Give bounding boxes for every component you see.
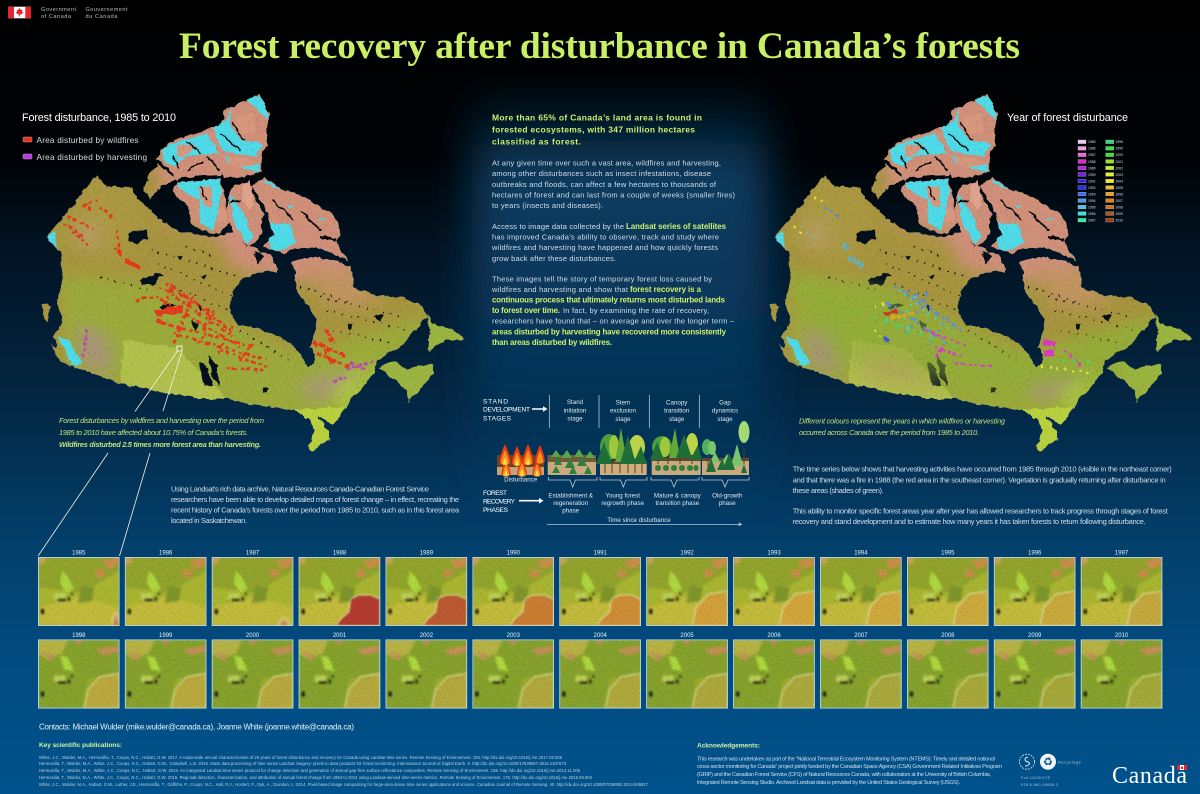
image: 1990: [472, 557, 554, 626]
year labels: 1994: [854, 550, 868, 556]
panel: left map heading and legend: Forest disturbance, 1985 to 2010: [22, 112, 176, 124]
legend: harvesting: Area disturbed by harvesting: [36, 153, 147, 162]
year labels: 2009: [1028, 633, 1042, 639]
legend: year of disturbance: 2001: [1116, 160, 1123, 164]
text block: time series explanation: [793, 464, 1172, 526]
arrow: phases: [519, 498, 544, 504]
image: 2009: [994, 640, 1075, 708]
key scientific publications: Key scientific publications:: [39, 742, 122, 749]
key scientific publications: Hermosilla, T., Wulder, M.A., White, J.C., Coops, N.C., Hobart, G.W., Campbell, L.B. 2016. Mass data processing of time series Landsat imagery: pixels to data products for forest monitoring. International Journal of Digital Earth. 9. http://dx.doi.org/10.1080/17538947.2016.1187673: [39, 761, 567, 766]
legend: year of disturbance: 1999: [1116, 147, 1123, 151]
image: 1989: [386, 557, 467, 626]
title: Forest recovery after disturbance in Canada’s forests: [179, 26, 1020, 67]
caption: left map: Wildfires disturbed 2.5 times more forest area than harvesting.: [59, 440, 261, 449]
contacts: Contacts: Michael Wulder (mike.wulder@canada.ca), Joanne White (joanne.white@canada.ca): [39, 722, 354, 732]
text block: time series explanation: recovery and stand development and to estimate how many years it has taken forests to return following disturbance.: [793, 517, 1146, 526]
year labels: 1999: [159, 633, 173, 639]
time series: 1985-2010: [38, 550, 1162, 708]
forest recovery phases label: RECOVERY: [483, 498, 516, 506]
diagram: stand development and forest recovery: [483, 395, 750, 526]
paragraph: disturbance: to years (insects and diseases).: [492, 201, 603, 210]
legend: year of disturbance: 2005: [1116, 186, 1123, 190]
legend: year of disturbance: 2000: [1116, 153, 1123, 157]
paragraph: disturbance: At any given time over such a vast area, wildfires and harvesting,: [492, 158, 721, 168]
year labels: 2003: [507, 633, 521, 639]
image: 1985: [38, 557, 120, 628]
paragraph: recovery: wildfires and harvesting and show that: [491, 285, 629, 294]
stage labels: stage: [669, 416, 685, 423]
caption: right map: [799, 416, 1006, 437]
legend: year of disturbance: 1992: [1088, 186, 1096, 190]
legend: year of disturbance: 1985: [1088, 140, 1096, 144]
year labels: 1985: [72, 550, 86, 556]
legend: year of disturbance: 1990: [1088, 173, 1096, 177]
heading: year of forest disturbance: Year of forest disturbance: [1007, 112, 1128, 124]
government of Canada signature: Gouvernement: [86, 7, 128, 13]
stage labels: [564, 399, 738, 423]
phase labels: Mature & canopy: [654, 492, 702, 499]
image: 1994: [820, 557, 902, 626]
year labels: 2005: [680, 633, 694, 639]
paragraph: recovery: In fact, by examining the rate of recovery,: [563, 306, 709, 315]
paragraph: disturbance: [492, 158, 736, 210]
legend: year of disturbance: 2002: [1116, 166, 1123, 170]
text block: time series explanation: and that there was a fire in 1988 (the red area in the southeast corner). Vegetation is gradually returning after disturbance in: [793, 476, 1166, 484]
year labels: 1995: [941, 550, 955, 556]
year labels: 2008: [941, 633, 955, 639]
government of Canada signature: [8, 7, 128, 20]
legend: year of disturbance: 2003: [1116, 173, 1123, 177]
paragraph: Landsat: grow back after these disturbances.: [492, 254, 616, 263]
icon: disturbance fire: [497, 444, 545, 477]
caption: left map: [59, 416, 264, 449]
paragraph: recovery: These images tell the story of temporary forest loss caused by: [492, 274, 712, 284]
legend: year of disturbance: 1991: [1088, 179, 1096, 183]
legend: year of disturbance: 1993: [1088, 192, 1096, 196]
year labels: 2001: [333, 633, 347, 639]
stage labels: Gap: [719, 399, 731, 406]
stage labels: Stand: [567, 399, 584, 406]
arrow: stages: [532, 406, 548, 412]
legend: year of disturbance: 1996: [1088, 212, 1096, 216]
year labels: 1987: [246, 550, 260, 556]
image: 2001: [299, 640, 380, 708]
text block: time series explanation: This ability to monitor specific forest areas year after year has allowed researchers to track progress through stages of forest: [793, 506, 1169, 516]
diagram: stand development and forest recovery: Time since disturbance: [607, 517, 671, 524]
text block: time series explanation: The time series below shows that harvesting activities have occurred from 1985 through 2010 (visible in the northeast corner): [793, 464, 1172, 474]
government of Canada signature: of Canada: [41, 14, 72, 20]
image: 1993: [733, 557, 815, 626]
legend: year of disturbance: 2006: [1116, 192, 1123, 196]
harvesting areas: [83, 330, 373, 382]
paragraph: recovery: researchers have found that – on average and over the longer term –: [492, 316, 735, 326]
stage labels: transition: [664, 408, 690, 415]
key scientific publications: [39, 742, 649, 787]
year labels: 1997: [1115, 550, 1129, 556]
legend: year of disturbance: 1997: [1088, 219, 1096, 223]
legend: year of disturbance: [1078, 140, 1123, 223]
caption: right map: occurred across Canada over the period from 1985 to 2010.: [799, 428, 979, 437]
year labels: 1990: [507, 550, 521, 556]
year labels: 1989: [420, 550, 434, 556]
image: 1995: [907, 557, 988, 626]
diagram: stand development and forest recovery: Disturbance: [504, 477, 538, 484]
paragraph: Landsat: Access to image data collected by the: [492, 222, 624, 231]
year labels: [72, 550, 1129, 639]
legend: year of disturbance: 2010: [1116, 219, 1123, 223]
panel: mature forest trees: [650, 428, 702, 475]
phase labels: regrowth phase: [601, 500, 645, 507]
heading statement: More than 65% of Canada’s land area is found in: [492, 112, 702, 122]
image: 2000: [212, 640, 293, 708]
stage labels: dynamics: [712, 408, 738, 415]
paragraph: disturbance: among other disturbances such as insect infestations, disease: [492, 169, 711, 178]
year labels: 1992: [680, 550, 694, 556]
legend: wildfires: Area disturbed by wildfires: [36, 136, 138, 145]
year labels: 2004: [594, 633, 608, 639]
year labels: 1998: [72, 633, 86, 639]
text block: Landsat data archive: located in Saskatchewan.: [171, 516, 247, 525]
image: 2004: [559, 640, 641, 708]
year labels: 1988: [333, 550, 347, 556]
year labels: 2002: [420, 633, 434, 639]
panel: left map heading and legend: [22, 112, 176, 162]
year labels: 2000: [246, 633, 260, 639]
image: 2002: [386, 640, 467, 708]
image: 1997: [1081, 557, 1162, 626]
stage labels: exclusion: [610, 408, 636, 415]
key scientific publications: Hermosilla, T., Wulder, M.A., White, J.C., Coops, N.C., Hobart, G.W. 2015. An integrated Landsat time series protocol for change detection and generation of annual gap-free surface reflectance composites. Remote Sensing of Environment. 158. http://dx.doi.org/10.1016/j.rse.2014.11.005: [39, 768, 581, 773]
stage labels: initiation: [564, 407, 587, 414]
stage labels: Canopy: [666, 399, 688, 406]
image: 1991: [559, 557, 641, 626]
image: 1987: [212, 557, 293, 628]
wildfire areas: [63, 200, 350, 370]
legend: year of disturbance: 1994: [1088, 199, 1096, 203]
icon: recycling and environmental marks: 978-0-660-09656-3: [1021, 783, 1058, 787]
paragraph: recovery: areas disturbed by harvesting have recovered more consistently: [492, 328, 727, 336]
acknowledgements: [697, 742, 1002, 786]
text block: Landsat data archive: Using Landsat’s rich data archive, Natural Resources Canada-Canadian Forest Service: [171, 484, 429, 494]
key scientific publications: White, J.C., Wulder, M.A., Hermosilla, T., Coops, N.C., Hobart, G.W. 2017. A nationwide annual characterization of 25 years of forest disturbance and recovery for Canada using Landsat time series. Remote Sensing of Environment. 194. http://dx.doi.org/10.1016/j.rse.2017.03.005: [39, 755, 563, 760]
government of Canada signature: du Canada: [86, 14, 118, 20]
phase labels: transition phase: [655, 500, 700, 507]
paragraph: recovery: [491, 274, 735, 347]
year labels: 1986: [159, 550, 173, 556]
caption: left map: 1985 to 2010 have affected about 10.75% of Canada’s forests.: [59, 428, 248, 437]
stand development stages label: STAND: [483, 398, 508, 405]
Canada wordmark: Canada: [1112, 763, 1187, 789]
phase labels: regeneration: [553, 500, 589, 507]
year labels: 1993: [767, 550, 781, 556]
acknowledgements: (GRIP) and the Canadian Forest Service (CFS) of Natural Resources Canada, with collaborators at the University of British Columbia,: [697, 772, 991, 778]
brackets: [548, 477, 749, 487]
map: year of forest disturbance: [761, 90, 1200, 457]
image: 1998: [38, 640, 120, 708]
map: forest disturbance 1985-2010: [33, 90, 473, 457]
icon: recycling and environmental marks: ♻: [1043, 756, 1053, 768]
acknowledgements: Acknowledgements:: [697, 742, 760, 750]
legend: year of disturbance: 1986: [1088, 147, 1096, 151]
acknowledgements: Integrated Remote Sensing Studio. Archived Landsat data is provided by the United States Geological Survey (USGS).: [697, 780, 960, 786]
paragraph: Landsat: has improved Canada’s ability to observe, track and study where: [492, 232, 719, 242]
image: 1992: [646, 557, 728, 626]
caption: right map: Different colours represent the years in which wildfires or harvesting: [799, 416, 1006, 426]
disturbance year specks: [793, 197, 1098, 373]
legend: year of disturbance: 1998: [1116, 140, 1123, 144]
heading statement: classified as forest.: [492, 136, 581, 146]
image: 2007: [820, 640, 902, 708]
government of Canada signature: Government: [41, 7, 76, 13]
panel: old-growth trees: [702, 421, 750, 475]
arrow: time since disturbance: [547, 523, 742, 526]
icon: Canadian flag: [8, 7, 31, 18]
acknowledgements: cross-sector monitoring for Canada” project jointly funded by the Canadian Space Agency (CSA) Government Related Initiatives Program: [697, 764, 1002, 770]
heading statement: forested ecosystems, with 347 million hectares: [492, 124, 695, 134]
stand development stages label: [483, 398, 530, 422]
image: 2003: [472, 640, 554, 708]
image: 1999: [125, 640, 206, 708]
text block: Landsat data archive: [171, 484, 460, 525]
phase labels: Establishment &: [548, 492, 594, 499]
year labels: 2010: [1115, 633, 1129, 639]
stage labels: stage: [615, 416, 631, 423]
paragraph: disturbance: hectares of forest and can last from a couple of weeks (smaller fires): [492, 190, 736, 200]
paragraph: Landsat: Landsat series of satellites: [626, 222, 727, 231]
icon: recycling and environmental marks: Recyclage: [1058, 760, 1082, 764]
text block: Landsat data archive: recent history of Canada’s forests over the period from 1985 to 2010, such as in this forest area: [171, 506, 460, 514]
legend: year of disturbance: 1988: [1088, 160, 1096, 164]
text block: intro: [491, 112, 736, 347]
phase labels: phase: [719, 500, 736, 507]
panel: young forest trees: [596, 428, 647, 475]
paragraph: recovery: forest recovery is a: [630, 285, 702, 294]
phase labels: Young forest: [605, 492, 640, 499]
image: 2008: [907, 640, 988, 708]
year labels: 2006: [767, 633, 781, 639]
paragraph: disturbance: outbreaks and floods, can affect a few hectares to thousands of: [492, 180, 717, 189]
forest recovery phases label: FOREST: [483, 490, 507, 497]
image: 2006: [733, 640, 815, 708]
stage labels: Stem: [616, 399, 630, 406]
heading statement: [492, 112, 702, 146]
legend: year of disturbance: 2009: [1116, 212, 1123, 216]
key scientific publications: White, J.C., Wulder, M.A., Hobart, G.W., Luther, J.E., Hermosilla, T., Griffiths, P., Coops, N.C., Hall, R.J., Hostert, P., Dyk, A., Guindon, L. 2014. Pixel-based image compositing for large-area dense time series applications and science. Canadian Journal of Remote Sensing. 40. http://dx.doi.org/10.1080/07038992.2014.945827: [39, 782, 649, 787]
image: 1988: [299, 557, 380, 626]
paragraph: recovery: continuous process that ultimately returns most disturbed lands: [492, 296, 726, 304]
phase labels: Old-growth: [712, 492, 743, 499]
year labels: 1991: [594, 550, 608, 556]
stand development stages label: DEVELOPMENT: [483, 407, 530, 414]
paragraph: recovery: to forest over time.: [492, 306, 560, 315]
paragraph: recovery: than areas disturbed by wildfires.: [492, 338, 612, 347]
stage labels: stage: [567, 416, 583, 423]
legend: year of disturbance: 1987: [1088, 153, 1096, 157]
stand development stages label: STAGES: [483, 415, 512, 422]
icon: recycling and environmental marks: Fo4-110/2017E: [1021, 776, 1051, 780]
caption: left map: Forest disturbances by wildfires and harvesting over the period from: [59, 416, 264, 425]
legend: year of disturbance: 2004: [1116, 179, 1123, 183]
text block: time series explanation: these areas (shades of green).: [793, 486, 884, 495]
paragraph: Landsat: [491, 222, 727, 263]
paragraph: Landsat: wildfires and harvesting have happened and how quickly forests: [491, 243, 718, 252]
image: 2010: [1081, 640, 1162, 708]
legend: year of disturbance: 1989: [1088, 166, 1096, 170]
panel: establishment phase trees: [548, 449, 596, 475]
forest recovery phases label: PHASES: [483, 507, 509, 514]
year labels: 1996: [1028, 550, 1042, 556]
phase labels: phase: [562, 507, 580, 514]
study area marker and connector lines: [38, 346, 182, 556]
text block: Landsat data archive: researchers have been able to develop detailed maps of forest change – in effect, recreating the: [171, 495, 459, 504]
phase labels: [548, 492, 743, 514]
image: 1996: [994, 557, 1075, 626]
forest recovery phases label: [483, 490, 516, 514]
legend: year of disturbance: 2008: [1116, 206, 1123, 210]
stage labels: stage: [717, 416, 733, 423]
key scientific publications: Hermosilla, T., Wulder, M.A., White, J.C., Coops, N.C., Hobart, G.W. 2015. Regional detection, characterization, and attribution of annual forest change from 1984 to 2012 using Landsat-derived time-series metrics. Remote Sensing of Environment. 170. http://dx.doi.org/10.1016/j.rse.2015.09.004: [39, 775, 593, 780]
icon: recycling and environmental marks: [1020, 754, 1082, 787]
image: 2005: [646, 640, 728, 708]
legend: year of disturbance: 1995: [1088, 206, 1096, 210]
image: 1986: [125, 557, 206, 626]
year labels: 2007: [854, 633, 868, 639]
legend: year of disturbance: 2007: [1116, 199, 1123, 203]
acknowledgements: This research was undertaken as part of the “National Terrestrial Ecosystem Monitoring System (NTEMS): Timely and detailed national: [697, 756, 995, 762]
